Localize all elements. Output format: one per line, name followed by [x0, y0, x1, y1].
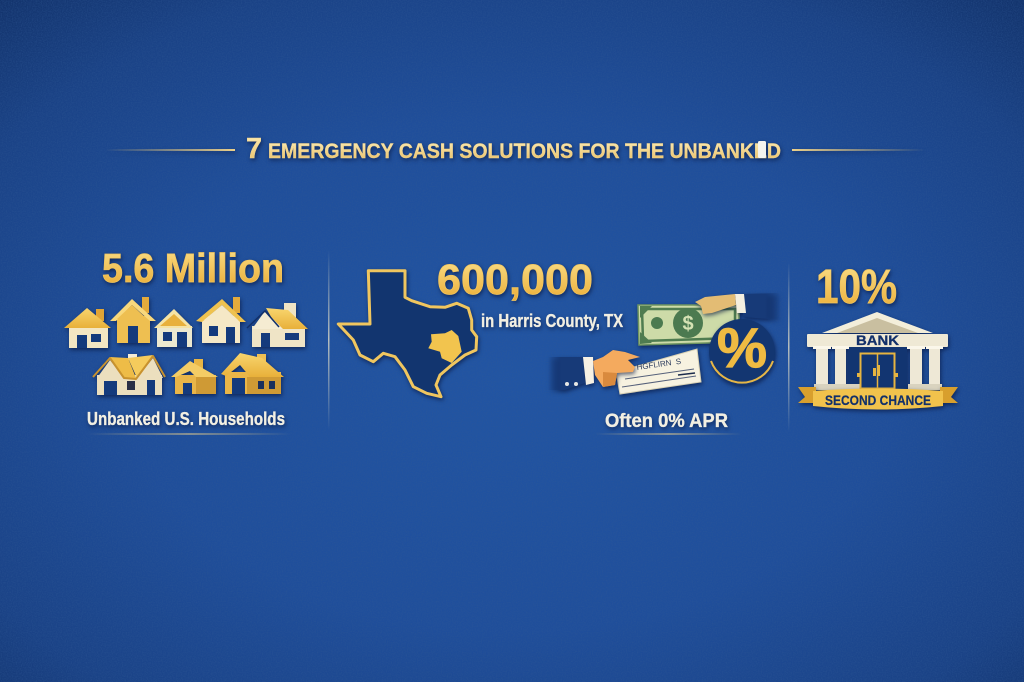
- panel: unbanked households: [64, 245, 308, 434]
- icon: house 2: [110, 297, 156, 343]
- heading: 600,000: 600,000: [437, 256, 593, 304]
- label: in Harris County, TX: in Harris County, TX: [481, 311, 623, 331]
- banner: Second Chance: SECOND CHANCE: [825, 392, 931, 408]
- icon: check: HGFLIRN S: [636, 357, 682, 372]
- icon: house 6: [93, 354, 165, 395]
- title: 7: [246, 133, 262, 165]
- icon: house 1: [64, 308, 111, 348]
- divider: [328, 250, 330, 430]
- icon: house 8: [221, 353, 284, 394]
- label: Unbanked U.S. Households: Unbanked U.S. Households: [87, 409, 285, 429]
- icon group: houses: [64, 297, 308, 395]
- panel: second chance bank: [798, 261, 958, 410]
- title: EMERGENCY CASH SOLUTIONS FOR THE UNBANKED: [268, 139, 781, 163]
- map: Texas with Harris County highlighted: [338, 271, 477, 397]
- icon: dollar bill: [638, 305, 739, 345]
- icon: house 3: [154, 309, 193, 347]
- heading: 5.6 Million: 5.6 Million: [102, 245, 284, 291]
- icon: bank building: BANK: [856, 332, 899, 348]
- divider: [788, 262, 790, 432]
- icon: top hand with sleeve: [695, 293, 780, 320]
- icon: lower hand with sleeve: [548, 350, 640, 390]
- label: Often 0% APR: Often 0% APR: [605, 411, 728, 432]
- title: [105, 133, 925, 165]
- icon: check: [616, 349, 701, 394]
- panel: Harris County: [338, 256, 780, 434]
- heading: 10%: 10%: [816, 261, 897, 314]
- icon: bank building: [807, 312, 948, 390]
- icon: percent badge: %: [717, 316, 767, 379]
- banner: Second Chance: [798, 387, 958, 410]
- icon: house 7: [171, 359, 218, 394]
- icon: percent badge: [709, 316, 775, 385]
- icon: dollar bill: $: [682, 313, 694, 335]
- icon: house 5: [247, 303, 308, 347]
- icon: house 4: [196, 297, 246, 343]
